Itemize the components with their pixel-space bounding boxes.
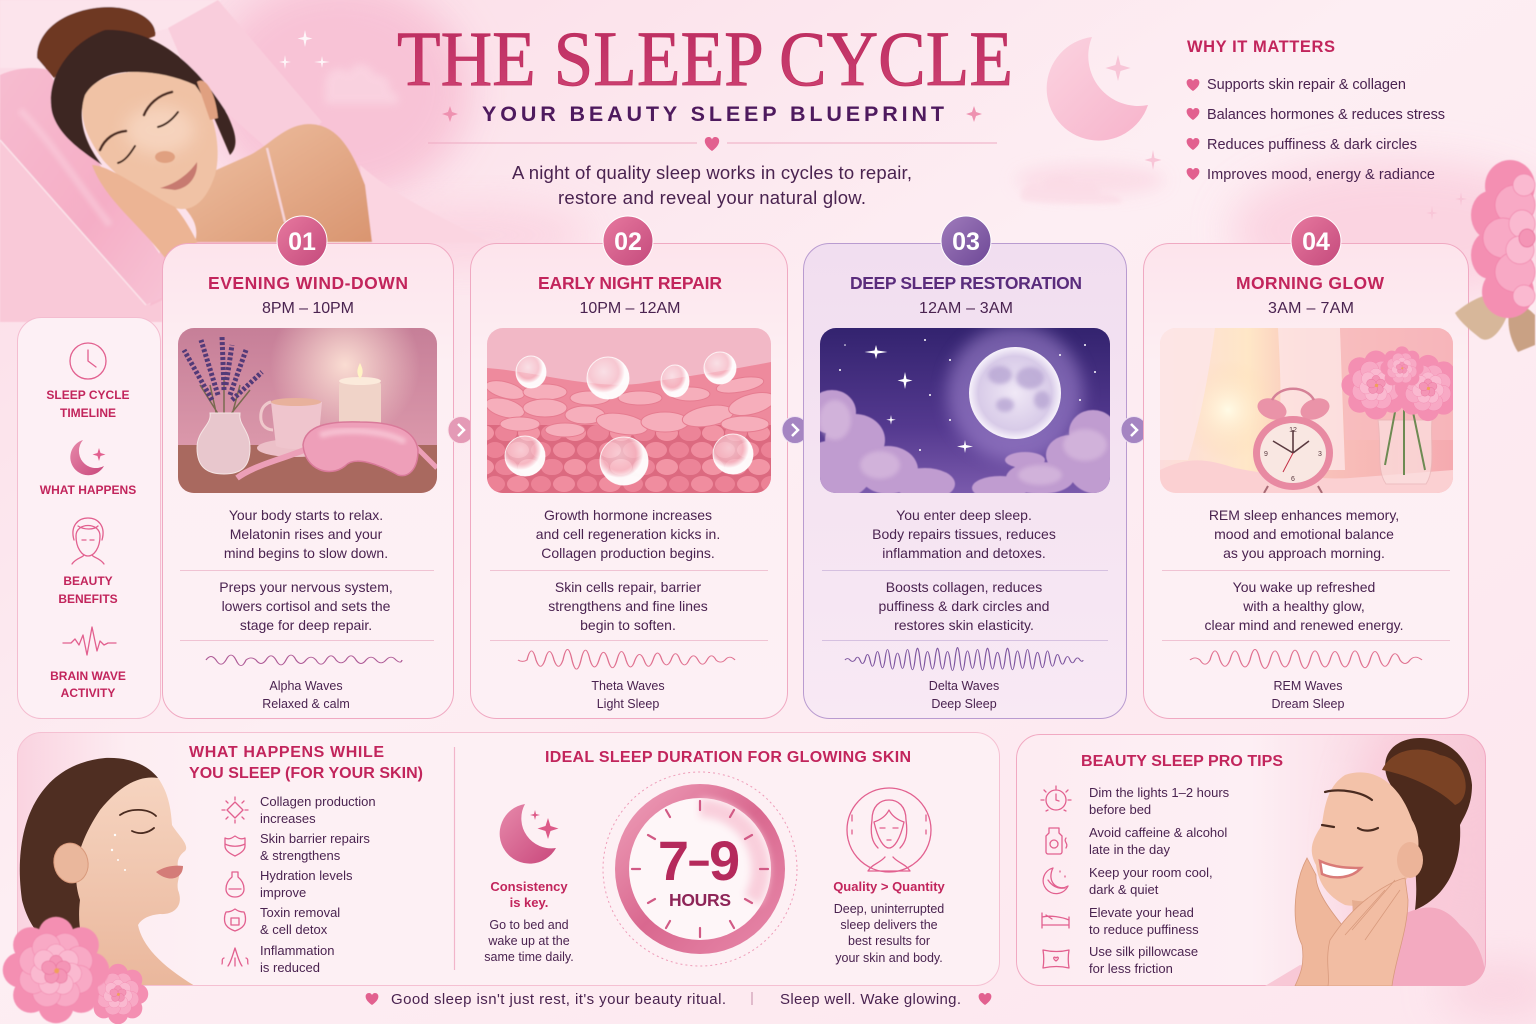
label: brain wave activity: ACTIVITY [61,686,115,700]
list: Supports skin repair & collagen [1207,77,1406,93]
time: 12AM – 3AM [919,300,1013,317]
text: what happens: inflammation and detoxes. [882,545,1046,561]
nightwear [360,165,490,243]
heading: ideal sleep duration: IDEAL SLEEP DURATION FOR GLOWING SKIN [545,749,911,766]
heading: what happens while you sleep: WHAT HAPPENS WHILE [189,744,384,761]
list item: collagen: Collagen production [260,794,376,809]
list item: barrier [225,831,370,863]
wave label: Theta Waves [591,679,665,693]
wave: theta [518,650,735,669]
icon: clock [70,343,106,379]
text: benefits: clear mind and renewed energy. [1205,617,1403,633]
text: quality over quantity: your skin and body. [835,951,943,965]
icon: moon [70,440,106,475]
label: beauty benefits: BEAUTY [63,574,113,588]
eyes brows lips [100,92,172,150]
tip: elevate head [1042,905,1199,937]
text: benefits: with a healthy glow, [1242,598,1365,614]
time: 10PM – 12AM [580,300,680,317]
tip: cool room [1043,865,1213,897]
footer tagline: Sleep well. Wake glowing. [780,991,961,1008]
badge 02: 02 [614,228,642,256]
heading: what happens while you sleep: YOU SLEEP (FOR YOUR SKIN) [189,765,423,782]
wave label [929,679,999,711]
chart: clock showing 7-9 hours: HOURS [669,890,731,910]
hair [51,30,235,165]
text: benefits: puffiness & dark circles and [879,598,1049,614]
text: what happens: mood and emotional balance [1214,526,1394,542]
label: sleep cycle timeline: TIMELINE [60,406,116,420]
badge 04: 04 [1302,228,1330,256]
list item: toxin [224,905,340,937]
list item: collagen: increases [260,811,316,826]
heading: BEAUTY SLEEP PRO TIPS [1081,753,1283,770]
panel: why it matters [1187,38,1445,183]
text: consistency: same time daily. [484,950,574,964]
panel: what happens while you sleep + ideal duration [3,732,1000,1024]
label: brain wave activity: BRAIN WAVE [50,669,126,683]
panel: step 04 morning glow [1144,216,1468,718]
intro text: restore and reveal your natural glow. [558,187,866,208]
decoration: peony top right [1455,160,1535,352]
illustration: woman profile with glowing skin [18,733,194,985]
list item: inflammation: is reduced [260,960,320,975]
text: what happens [536,507,720,561]
tip: dim lights [1041,785,1230,817]
tip: dim lights: before bed [1089,802,1151,817]
bedding [0,140,162,322]
intro text: A night of quality sleep works in cycles to repair, [512,162,912,183]
text: quality over quantity: Quality > Quantity [833,879,946,894]
wave: delta [845,647,1083,670]
text: benefits: stage for deep repair. [240,617,372,633]
wave label: Relaxed & calm [262,697,350,711]
text: consistency: Go to bed and [489,918,569,932]
footer tagline [366,991,991,1008]
icon: woman portrait in circle [847,788,931,872]
illustration: sleeping woman on pink pillows [0,0,490,322]
icon: moon with stars [500,804,558,864]
chart: clock showing 7-9 hours: 7 [658,829,689,892]
text: benefits: Skin cells repair, barrier [555,579,701,595]
chart: clock showing 7-9 hours [603,772,797,966]
list [1187,77,1445,183]
heading: WHY IT MATTERS [1187,38,1335,56]
heading: MORNING GLOW [1236,273,1384,293]
text: benefits [879,579,1049,633]
image: skin cells with bubbles [483,328,778,495]
time: 8PM – 10PM [262,300,354,317]
list item: collagen [222,794,376,826]
text: quality over quantity [833,879,946,965]
face [82,72,218,209]
tip: caffeine: late in the day [1089,842,1170,857]
list item: toxin: & cell detox [260,922,328,937]
text: benefits [548,579,708,633]
panel: step 01 evening wind-down [162,216,454,718]
list item: toxin: Toxin removal [260,905,340,920]
intro text [512,162,912,208]
list item: inflammation: Inflammation [260,943,334,958]
list: Improves mood, energy & radiance [1207,167,1435,183]
tip: silk pillowcase: Use silk pillowcase [1089,944,1198,959]
heading: what happens while you sleep [189,744,423,782]
arrow 1 [448,416,474,444]
list item: barrier: Skin barrier repairs [260,831,370,846]
badge 01 [277,216,327,266]
wave: alpha [206,655,402,666]
wave label [1272,679,1345,711]
wave label: Delta Waves [929,679,999,693]
label: brain wave activity [50,669,126,700]
list item: hydration: Hydration levels [260,868,353,883]
badge 03 [941,216,991,266]
tip: caffeine: Avoid caffeine & alcohol [1089,825,1227,840]
heading: DEEP SLEEP RESTORATION [850,273,1082,293]
image: alarm clock and peonies: 12 [1289,427,1297,434]
decoration: peony lower left [88,964,148,1024]
wave label: Deep Sleep [931,697,997,711]
text: benefits [219,579,393,633]
hand [92,165,198,258]
wave label: Alpha Waves [269,679,343,693]
label: beauty benefits: BENEFITS [58,592,118,606]
tip: elevate head: Elevate your head [1089,905,1194,920]
text: what happens [1209,507,1399,561]
list item: inflammation [222,943,334,975]
text: what happens: as you approach morning. [1223,545,1385,561]
text: quality over quantity: sleep delivers the [840,918,938,932]
text: benefits: You wake up refreshed [1233,579,1375,595]
text: benefits: restores skin elasticity. [894,617,1034,633]
icon: crescent moon with clouds [1021,37,1467,220]
tip: cool room: dark & quiet [1089,882,1159,897]
image: alarm clock and peonies: 3 [1318,451,1322,458]
list item: hydration [226,868,353,900]
text: benefits: strengthens and fine lines [548,598,708,614]
text: what happens: REM sleep enhances memory, [1209,507,1399,523]
list: Balances hormones & reduces stress [1207,107,1445,123]
text: benefits: Boosts collagen, reduces [886,579,1042,595]
divider with heart [428,137,997,151]
panel: step 02 early night repair [470,216,788,718]
list: Reduces puffiness & dark circles [1207,137,1417,153]
text: what happens: You enter deep sleep. [896,507,1032,523]
footer tagline: Good sleep isn't just rest, it's your beauty ritual. [391,991,726,1008]
torso [185,124,372,242]
text: consistency: Consistency [490,879,568,894]
wave label [262,679,350,711]
text: what happens [872,507,1056,561]
text: what happens: mind begins to slow down. [224,545,388,561]
label: beauty benefits [58,574,118,606]
time: 3AM – 7AM [1268,300,1354,317]
text: quality over quantity: best results for [848,934,930,948]
wave label: Light Sleep [597,697,659,711]
heading: EARLY NIGHT REPAIR [538,273,722,293]
front pillow [0,68,165,305]
wave label [591,679,665,711]
tip: silk pillowcase [1043,944,1198,976]
text: what happens: Your body starts to relax. [229,507,383,523]
chart: clock showing 7-9 hours: 9 [709,829,740,892]
arrow 3 [1121,416,1147,444]
text: what happens [224,507,388,561]
hair bun [37,7,155,78]
title: THE SLEEP CYCLE [397,15,1013,102]
list item: hydration: improve [260,885,306,900]
badge 03: 03 [952,228,980,256]
badge 04 [1291,216,1341,266]
label: what happens: WHAT HAPPENS [40,483,136,497]
text: what happens: Growth hormone increases [544,507,712,523]
badge 02 [603,216,653,266]
illustration: smiling woman with hands on face [1265,720,1486,986]
wave label: REM Waves [1274,679,1342,693]
image: alarm clock and peonies: 9 [1264,451,1268,458]
list item: barrier: & strengthens [260,848,341,863]
text: what happens: Body repairs tissues, reduces [872,526,1056,542]
text: benefits: lowers cortisol and sets the [222,598,391,614]
image: alarm clock and peonies [1160,328,1461,493]
tip: cool room: Keep your room cool, [1089,865,1213,880]
panel: side navigation [18,318,160,718]
text: what happens: and cell regeneration kicks in. [536,526,720,542]
back pillow [168,0,322,160]
label: sleep cycle timeline [46,388,130,420]
text: consistency: wake up at the [487,934,570,948]
tip: silk pillowcase: for less friction [1089,961,1173,976]
label: sleep cycle timeline: SLEEP CYCLE [46,388,130,402]
tip: elevate head: to reduce puffiness [1089,922,1199,937]
subtitle: YOUR BEAUTY SLEEP BLUEPRINT [482,102,944,126]
text: benefits: begin to soften. [580,617,676,633]
panel: step 03 deep sleep restoration [797,216,1128,718]
panel: beauty sleep pro tips [1016,720,1486,986]
chart: clock showing 7-9 hours: – [689,840,709,881]
text: what happens: Melatonin rises and your [230,526,383,542]
wave: rem [1190,650,1422,668]
text: consistency: is key. [510,895,548,910]
heading: EVENING WIND-DOWN [208,273,408,293]
image: full moon night sky [820,328,1110,493]
wave label: Dream Sleep [1272,697,1345,711]
tip: caffeine [1046,825,1227,857]
image: alarm clock and peonies: 6 [1291,476,1295,483]
text: consistency [484,879,574,964]
image: lavender candle and silk eye mask [178,328,437,493]
arrow 2 [782,416,808,444]
icon: brain wave [63,627,116,655]
icon: face [72,518,104,564]
text: quality over quantity: Deep, uninterrupted [834,902,944,916]
badge 01: 01 [288,228,316,256]
tip: dim lights: Dim the lights 1–2 hours [1089,785,1230,800]
text: what happens: Collagen production begins. [541,545,715,561]
text: benefits [1205,579,1403,633]
text: benefits: Preps your nervous system, [219,579,393,595]
